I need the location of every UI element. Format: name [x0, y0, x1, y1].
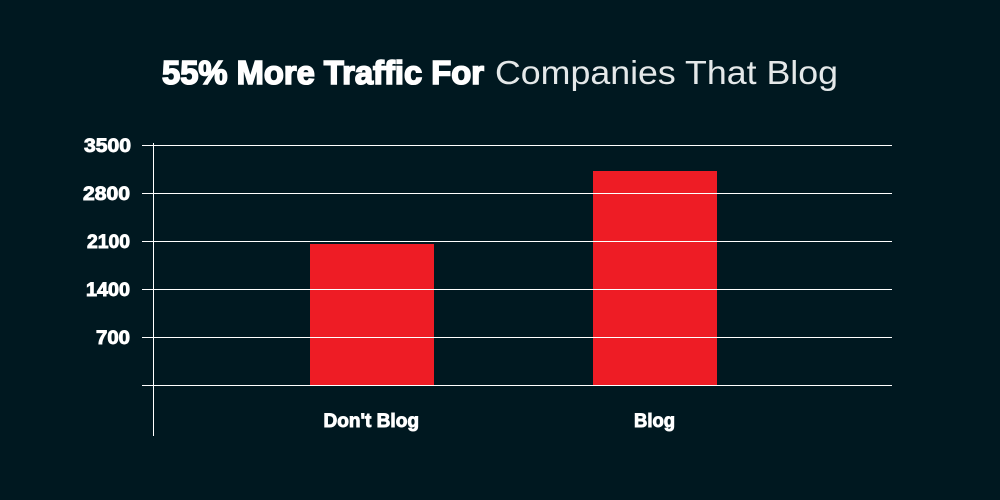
y axis labels: 2800 [83, 184, 130, 205]
title: 55% More Traffic For [162, 54, 484, 91]
title [162, 54, 838, 91]
title: Companies That Blog [495, 54, 838, 91]
y axis labels: 700 [96, 328, 130, 349]
x axis label: Don't Blog: Don't Blog [324, 411, 419, 432]
bar chart [83, 136, 892, 436]
y axis labels: 3500 [84, 136, 131, 157]
bar: Don't Blog [310, 244, 434, 385]
x axis label: Blog: Blog [634, 411, 675, 432]
y axis labels [83, 136, 131, 349]
y axis labels: 1400 [86, 280, 130, 301]
y axis labels: 2100 [87, 232, 130, 253]
bar: Blog [593, 171, 717, 385]
